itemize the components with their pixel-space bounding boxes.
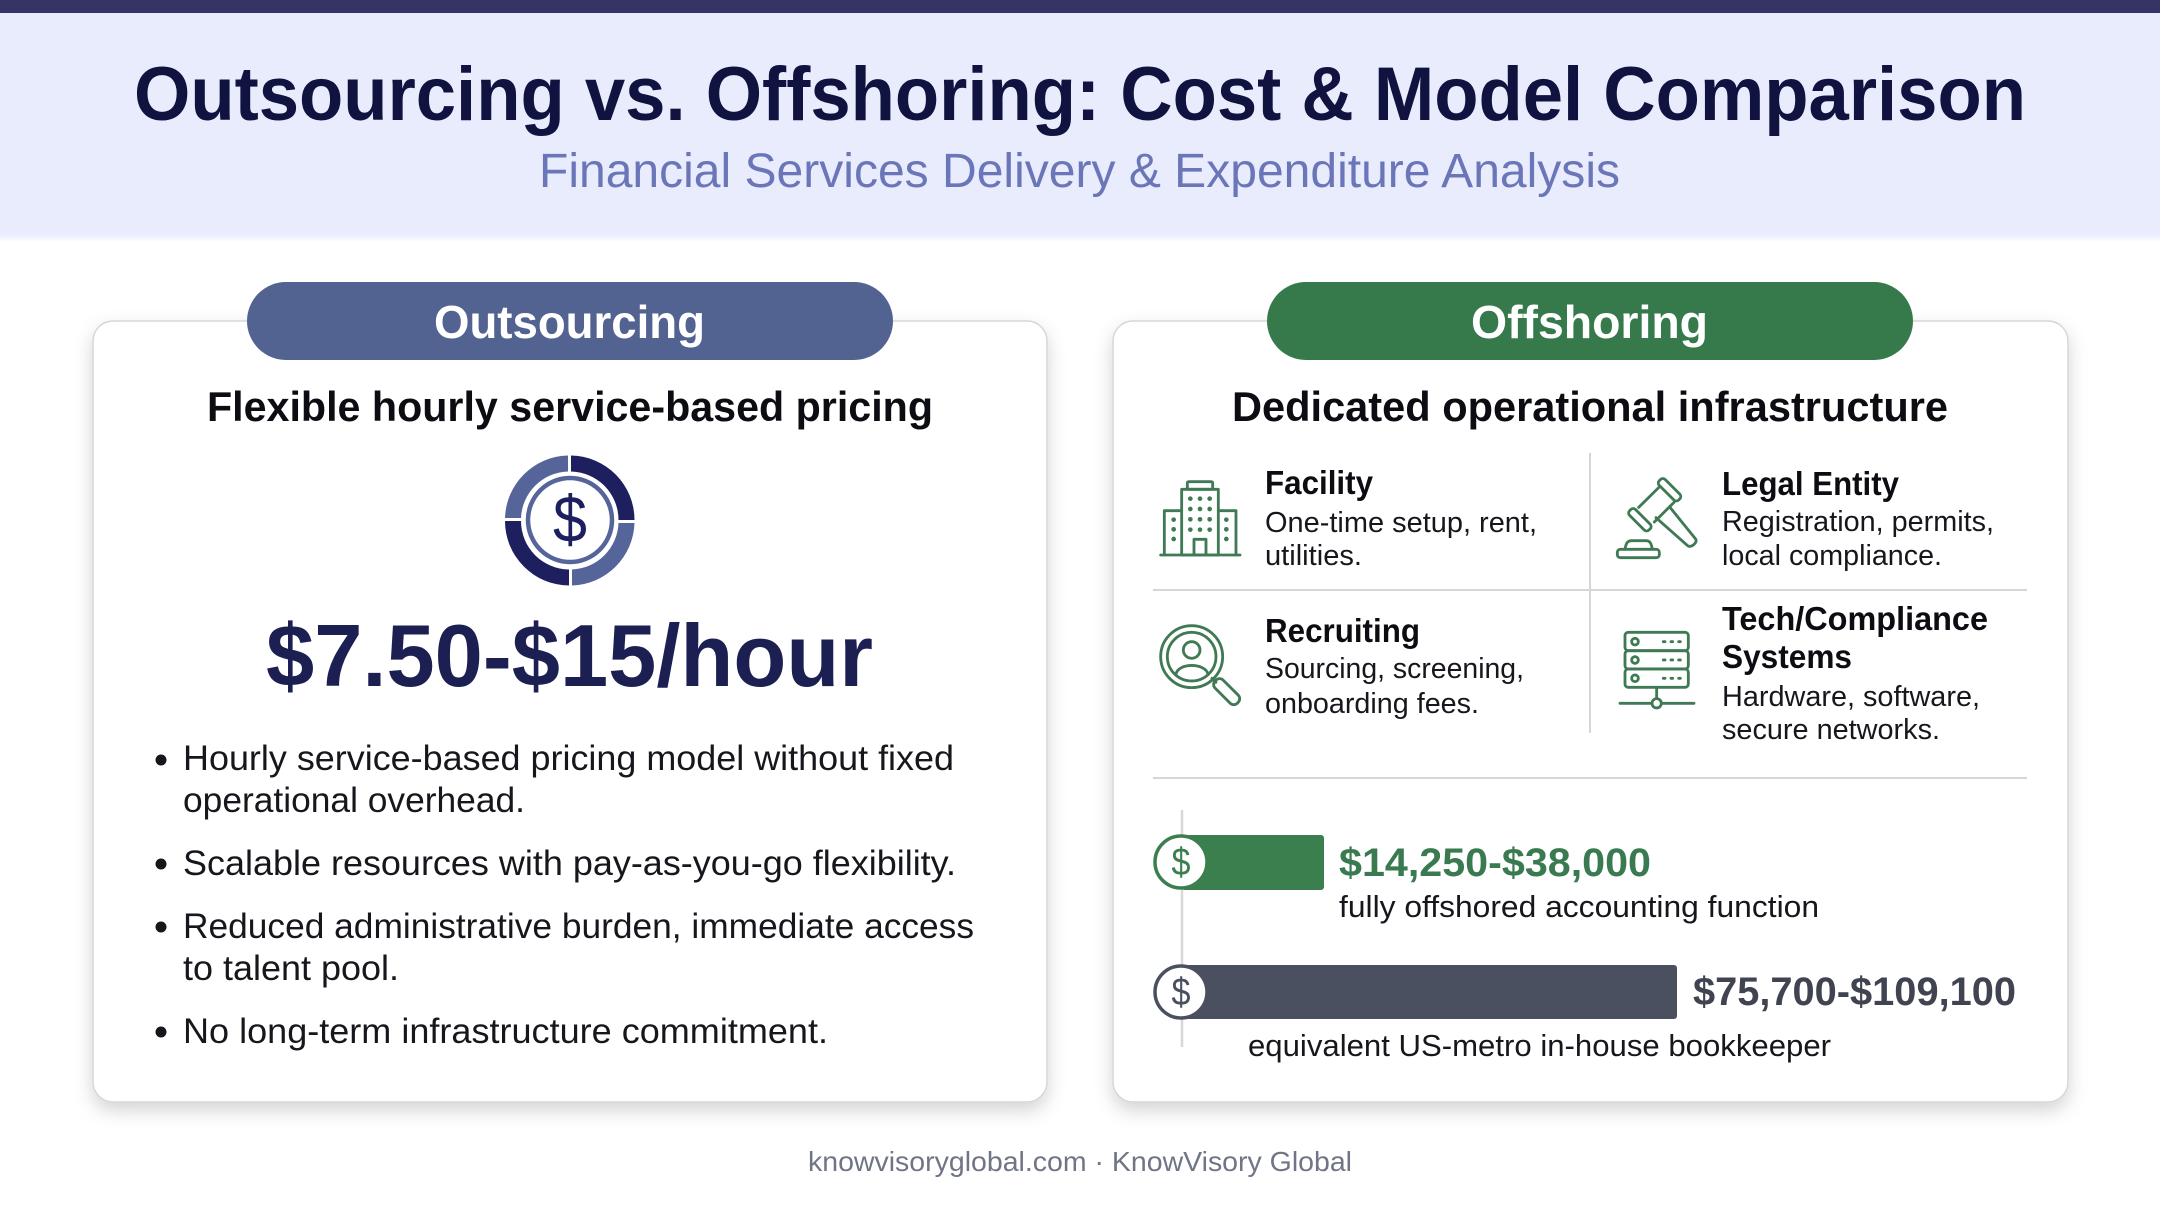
recruiting text: Sourcing, screening, [1265, 653, 1524, 685]
icon: dollar coin ring [505, 456, 634, 586]
legal entity text: local compliance. [1722, 540, 1942, 572]
cost chart [1155, 810, 2016, 1063]
facility text [1265, 464, 1537, 572]
tech compliance text [1722, 600, 1988, 746]
footer: knowvisoryglobal.com · KnowVisory Global [808, 1146, 1352, 1177]
in-house cost bar [1155, 965, 2016, 1063]
tech compliance text: Tech/Compliance [1722, 600, 1988, 637]
facility text: utilities. [1265, 540, 1362, 572]
header band [0, 0, 2160, 241]
facility text: One-time setup, rent, [1265, 507, 1537, 539]
offshoring pill [1267, 282, 1913, 360]
tech compliance text: Systems [1722, 638, 1852, 675]
in-house cost bar: $ [1172, 971, 1191, 1014]
offshored cost bar: fully offshored accounting function [1339, 889, 1819, 924]
facility text: Facility [1265, 464, 1374, 501]
legal entity text: Legal Entity [1722, 465, 1900, 502]
panel: offshoring [1113, 282, 2068, 1102]
tech compliance text: secure networks. [1722, 714, 1940, 746]
outsourcing pill: Outsourcing [434, 296, 705, 348]
offshored cost bar: $ [1172, 841, 1191, 884]
icon: server network [1620, 632, 1694, 708]
recruiting text [1265, 612, 1524, 720]
title: Outsourcing vs. Offshoring: Cost & Model Comparison [134, 52, 2026, 137]
outsourcing subheading: Flexible hourly service-based pricing [207, 383, 933, 430]
in-house cost bar: equivalent US-metro in-house bookkeeper [1248, 1028, 1831, 1063]
bullet list: Scalable resources with pay-as-you-go flexibility. [183, 844, 956, 883]
in-house cost bar: $75,700-$109,100 [1693, 970, 2016, 1014]
bullet list: No long-term infrastructure commitment. [183, 1012, 828, 1051]
icon: dollar coin ring: $ [553, 482, 587, 556]
bullet list: to talent pool. [183, 949, 399, 988]
offshored cost bar [1155, 835, 1819, 924]
legal entity text [1722, 465, 1994, 572]
bullet list: Hourly service-based pricing model without fixed [183, 739, 954, 778]
outsourcing price: $7.50-$15/hour [266, 606, 873, 705]
panel: outsourcing [93, 282, 1047, 1102]
offshoring subheading: Dedicated operational infrastructure [1232, 383, 1948, 430]
icon: recruiting magnifier [1161, 626, 1242, 707]
bullet list: operational overhead. [183, 781, 525, 820]
outsourcing pill [247, 282, 893, 360]
offshored cost bar: $14,250-$38,000 [1339, 841, 1651, 885]
legal entity text: Registration, permits, [1722, 506, 1994, 538]
recruiting text: onboarding fees. [1265, 688, 1479, 720]
bullet list [156, 739, 974, 1051]
icon: gavel [1617, 477, 1696, 558]
icon: building [1161, 482, 1240, 555]
subtitle: Financial Services Delivery & Expenditure Analysis [539, 145, 1620, 198]
bullet list: Reduced administrative burden, immediate access [183, 907, 974, 946]
offshoring pill: Offshoring [1471, 296, 1708, 348]
tech compliance text: Hardware, software, [1722, 681, 1980, 713]
recruiting text: Recruiting [1265, 612, 1420, 649]
